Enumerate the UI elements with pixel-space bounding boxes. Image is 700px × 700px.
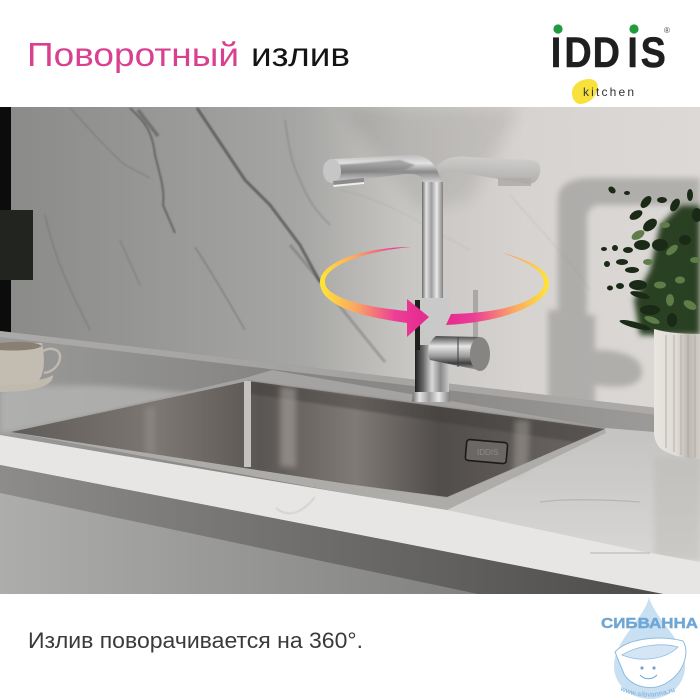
dark appliance at left edge xyxy=(0,107,33,335)
title xyxy=(27,37,350,74)
sink front rim xyxy=(11,429,606,510)
left arc with arrowhead xyxy=(320,247,429,337)
sink corner highlight xyxy=(244,381,251,467)
plant xyxy=(601,185,700,459)
caption: Излив поворачивается на 360°. xyxy=(28,628,363,653)
watermark bath xyxy=(615,638,686,688)
faucet base xyxy=(412,392,450,402)
overflow drain xyxy=(465,439,508,464)
plant pot xyxy=(654,329,700,459)
spout xyxy=(323,155,441,187)
faucet shadow on wall xyxy=(548,178,700,405)
countertop xyxy=(0,331,700,562)
sink rim xyxy=(150,370,605,498)
plant foliage xyxy=(601,185,700,335)
logo: IDDIS kitchen: ® xyxy=(664,26,670,35)
logo: IDDIS kitchen: kitchen xyxy=(583,85,634,99)
coffee cup xyxy=(0,342,60,392)
cabinet front xyxy=(0,465,663,594)
overflow drain: IDDIS xyxy=(477,448,498,457)
photo: kitchen scene xyxy=(0,107,700,594)
sink basin xyxy=(11,381,605,497)
wall: marble backsplash xyxy=(0,107,700,417)
faucet column xyxy=(422,182,443,302)
lever xyxy=(473,290,478,340)
title: излив xyxy=(251,37,350,74)
faucet xyxy=(323,155,540,402)
ghost spout: rotated position xyxy=(433,156,540,186)
watermark drop xyxy=(614,597,685,699)
mixer handle xyxy=(428,336,490,371)
counter front edge: white strip xyxy=(0,435,700,594)
rotation arrow xyxy=(320,247,549,337)
watermark: Sibvanna xyxy=(601,598,699,699)
faucet lower body xyxy=(415,345,449,395)
logo: IDDIS kitchen: IDDIS xyxy=(551,28,666,77)
right arc with arrowhead xyxy=(446,253,549,325)
watermark: Sibvanna: www.sibvanna.ru xyxy=(620,686,675,697)
watermark: Sibvanna: СИБВАННА xyxy=(601,616,699,632)
sink xyxy=(11,370,606,510)
logo: IDDIS kitchen xyxy=(551,24,670,104)
title: Поворотный xyxy=(27,37,239,74)
faucet collar xyxy=(422,298,443,346)
